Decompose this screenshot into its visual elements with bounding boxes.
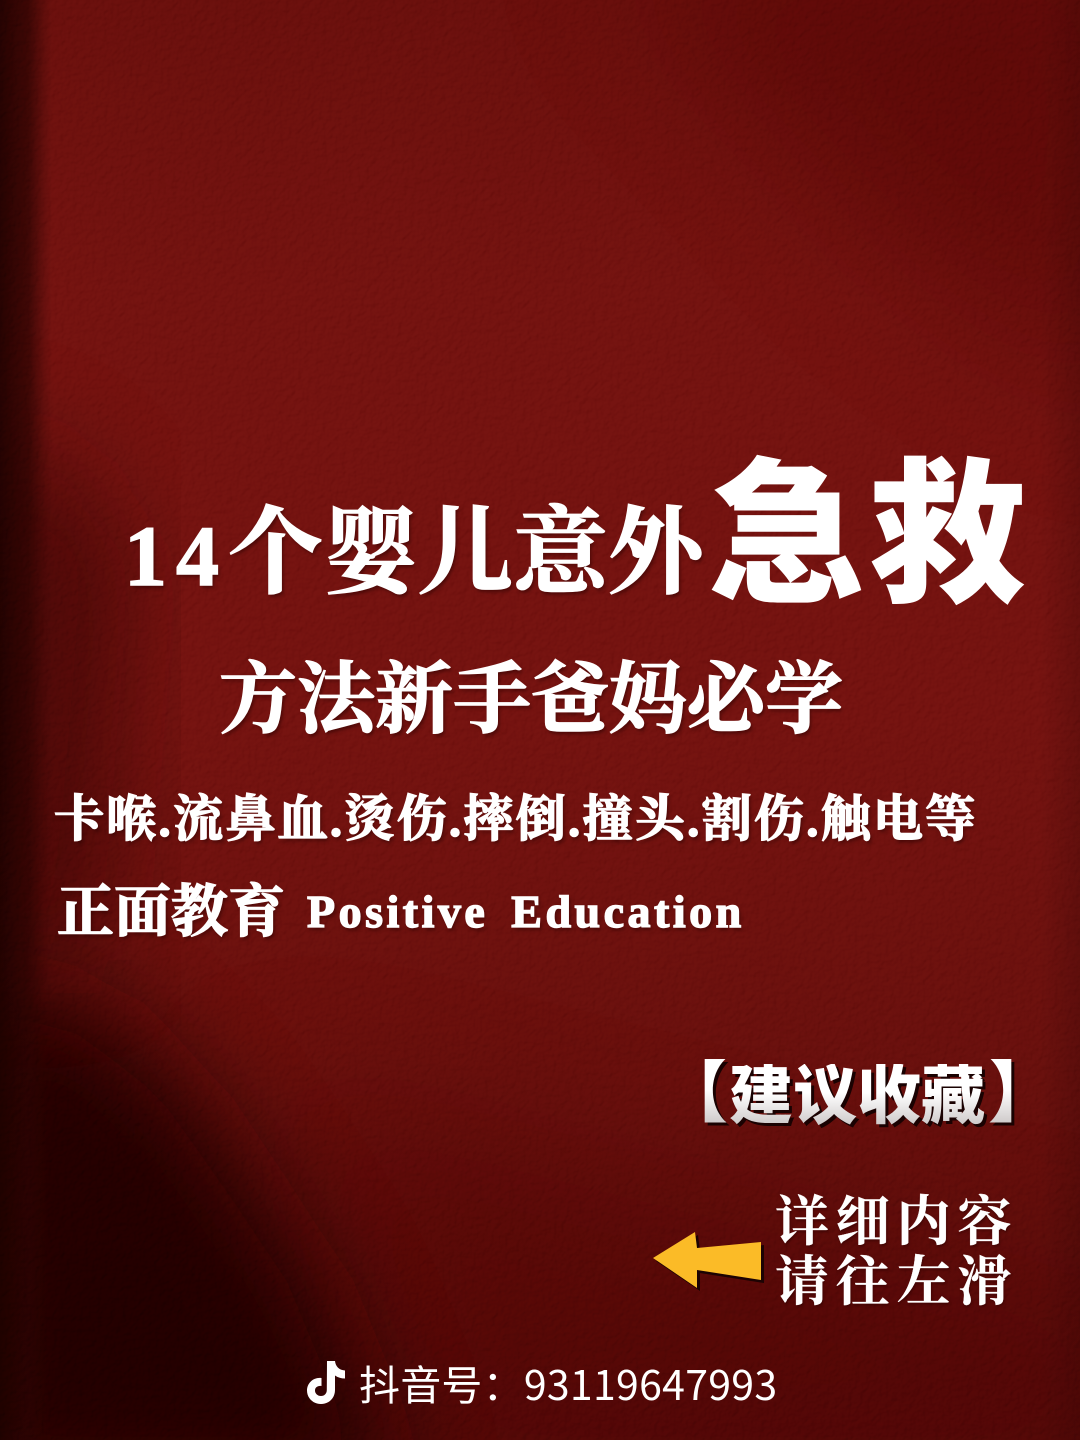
brand line xyxy=(57,881,745,944)
subtitle: accident list: 卡喉.流鼻血.烫伤.摔倒.撞头.割伤.触电等 xyxy=(54,791,977,847)
title text: 14个婴儿意外: 14个婴儿意外 xyxy=(124,500,703,606)
left bracket: 【 xyxy=(660,1055,728,1131)
icon: yellow left arrow xyxy=(653,1232,764,1291)
swipe hint text: 详细内容 xyxy=(775,1192,1018,1252)
title line 2: 方法新手爸妈必学 xyxy=(219,656,843,743)
bookmark tag xyxy=(660,1055,1056,1132)
brand English: Positive Education xyxy=(307,886,745,937)
swipe hint text: 请往左滑 xyxy=(775,1252,1018,1312)
swipe hint text xyxy=(775,1192,1018,1312)
footer: account id xyxy=(307,1352,777,1412)
brand Chinese: 正面教育 xyxy=(57,881,285,944)
right bracket: 】 xyxy=(988,1055,1056,1131)
icon: music note logo xyxy=(307,1361,345,1404)
account text: 抖音号：93119647993 xyxy=(359,1352,777,1412)
title line 1 xyxy=(124,449,1030,624)
title emphasis: 急救: 急救 xyxy=(708,449,1030,624)
tag text: 建议收藏 xyxy=(729,1060,985,1132)
